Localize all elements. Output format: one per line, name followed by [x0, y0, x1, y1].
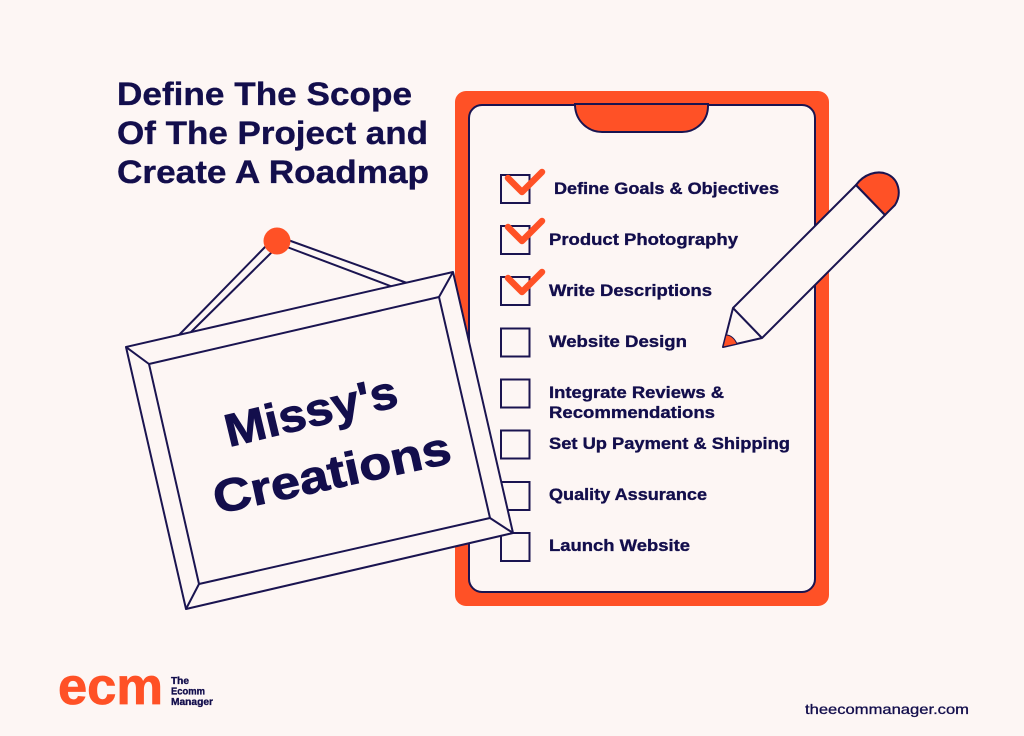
- item: Integrate Reviews: Recommendations: [549, 404, 715, 422]
- item: Define Goals: Define Goals & Objectives: [554, 180, 779, 198]
- logo: [58, 658, 213, 716]
- website url: theecommanager.com: [805, 701, 969, 717]
- title: Create A Roadmap: [117, 154, 429, 190]
- logo wordmark: [171, 675, 213, 708]
- sign frame: [126, 272, 513, 609]
- logo: ecm: [58, 658, 163, 716]
- item: Payment and Shipping: Set Up Payment & Shipping: [549, 435, 790, 453]
- item: Website Design: Website Design: [549, 333, 687, 351]
- item: Quality Assurance: Quality Assurance: [549, 486, 707, 504]
- item: Integrate Reviews: Integrate Reviews &: [549, 384, 724, 402]
- item: Integrate Reviews: [501, 380, 724, 422]
- panel: clipboard: [455, 91, 829, 606]
- hanger wires: [178, 240, 407, 336]
- item: Write Descriptions: [501, 272, 712, 305]
- hanging sign: [126, 228, 513, 609]
- item: Launch Website: [501, 533, 690, 561]
- title: Of The Project and: [117, 115, 428, 151]
- item: Write Descriptions: Write Descriptions: [549, 282, 712, 300]
- item: Product Photography: Product Photography: [549, 231, 739, 249]
- item: Define Goals: [501, 172, 779, 203]
- clipboard clip: [575, 104, 708, 132]
- sign text: [208, 365, 456, 524]
- checklist: [501, 172, 790, 561]
- sign text: Missy's: [219, 365, 402, 457]
- item: Website Design: [501, 328, 687, 356]
- icon: pencil: [723, 172, 899, 347]
- logo wordmark: Manager: [171, 696, 213, 708]
- item: Quality Assurance: [501, 482, 707, 510]
- title: [117, 76, 429, 190]
- item: Product Photography: [501, 221, 739, 254]
- logo wordmark: Ecomm: [171, 686, 205, 698]
- sign text: Creations: [208, 421, 456, 524]
- hanger pin: [264, 228, 290, 254]
- item: Payment and Shipping: [501, 430, 790, 458]
- item: Launch Website: Launch Website: [549, 537, 690, 555]
- title: Define The Scope: [117, 76, 412, 112]
- logo wordmark: The: [171, 675, 189, 687]
